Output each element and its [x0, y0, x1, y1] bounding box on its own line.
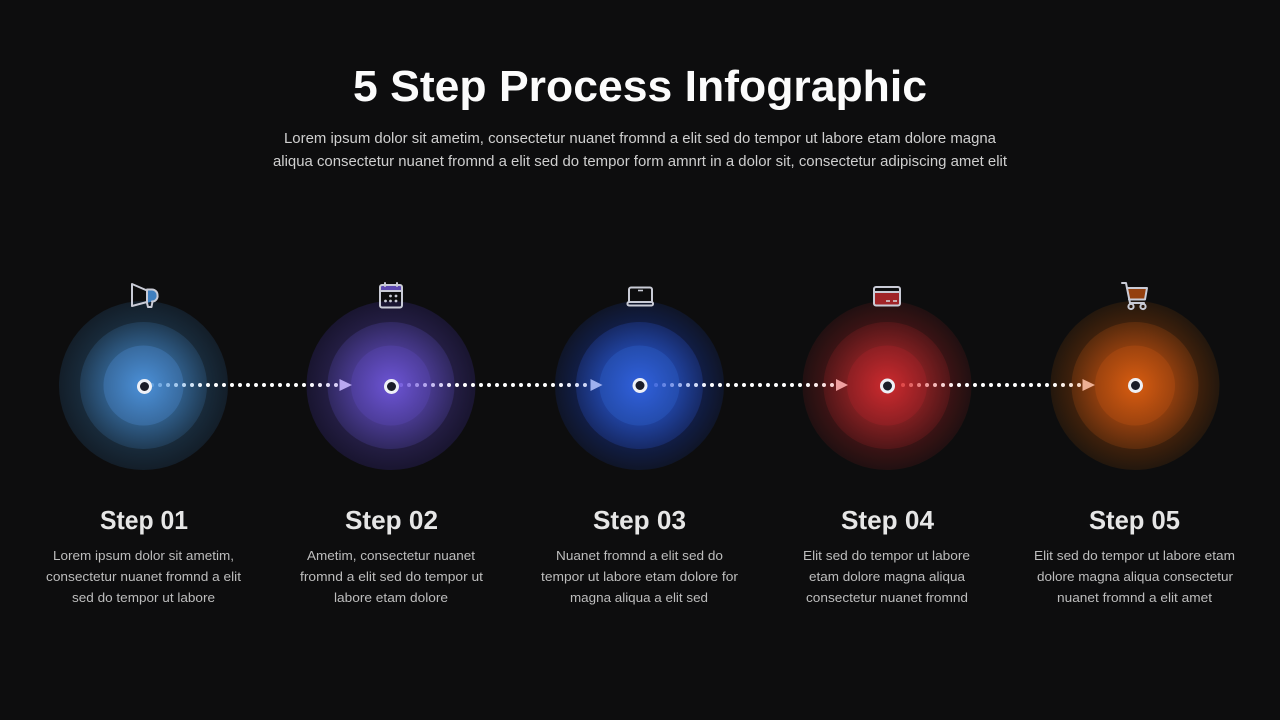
arrow: step 4 to step 5	[903, 379, 1095, 391]
node: step 4	[882, 380, 894, 392]
text block: step 04: consectetur nuanet fromnd	[806, 590, 968, 605]
text block: step 03	[541, 548, 739, 605]
text block: step 04	[803, 548, 970, 605]
concentric circle: step 3	[555, 301, 724, 470]
title: 5 Step Process Infographic	[353, 62, 927, 111]
text block: step 01: consectetur nuanet fromnd a elit	[46, 569, 241, 584]
node: step 5	[1130, 380, 1142, 392]
node: step 3	[634, 380, 646, 392]
icon: laptop	[628, 288, 653, 306]
text block: step 05: Elit sed do tempor ut labore etam	[1034, 548, 1235, 563]
heading: step 02: Step 02	[345, 505, 438, 535]
subtitle: aliqua consectetur nuanet fromnd a elit sed do tempor form amnrt in a dolor sit, consectetur adipiscing amet elit	[273, 153, 1008, 170]
heading: step 05: Step 05	[1089, 505, 1180, 535]
text block: step 01: sed do tempor ut labore	[72, 590, 215, 605]
heading: step 03: Step 03	[593, 505, 686, 535]
text block: step 04: etam dolore magna aliqua	[809, 569, 966, 584]
text block: step 02	[300, 548, 483, 605]
text block: step 02: fromnd a elit sed do tempor ut	[300, 569, 483, 584]
node: step 2	[386, 380, 398, 392]
subtitle: Lorem ipsum dolor sit ametim, consectetur nuanet fromnd a elit sed do tempor ut labore etam dolore magna	[284, 130, 997, 147]
node: step 1	[138, 380, 150, 392]
concentric circle: step 2	[306, 301, 476, 470]
text block: step 05: dolore magna aliqua consectetur	[1037, 569, 1234, 584]
concentric circle: step 1	[59, 301, 228, 470]
arrow: step 3 to step 4	[656, 379, 848, 391]
concentric circle: step 5	[1050, 301, 1220, 470]
text block: step 03: magna aliqua a elit sed	[570, 590, 708, 605]
concentric circle: step 4	[802, 301, 972, 470]
text block: step 01	[46, 548, 241, 605]
text block: step 02: labore etam dolore	[334, 590, 448, 605]
icon: credit card	[874, 287, 900, 306]
icon: calendar	[380, 283, 402, 308]
text block: step 02: Ametim, consectetur nuanet	[307, 548, 475, 563]
icon: shopping cart	[1122, 283, 1147, 309]
text block: step 04: Elit sed do tempor ut labore	[803, 548, 970, 563]
heading: step 01: Step 01	[100, 505, 188, 535]
arrow: step 2 to step 3	[401, 379, 602, 391]
icon: megaphone	[132, 284, 158, 307]
heading: step 04: Step 04	[841, 505, 935, 535]
text block: step 03: Nuanet fromnd a elit sed do	[556, 548, 723, 563]
arrow: step 1 to step 2	[152, 379, 352, 391]
text block: step 05: nuanet fromnd a elit amet	[1057, 590, 1212, 605]
text block: step 05	[1034, 548, 1235, 605]
subtitle	[273, 130, 1008, 170]
text block: step 03: tempor ut labore etam dolore for	[541, 569, 739, 584]
text block: step 01: Lorem ipsum dolor sit ametim,	[53, 548, 234, 563]
